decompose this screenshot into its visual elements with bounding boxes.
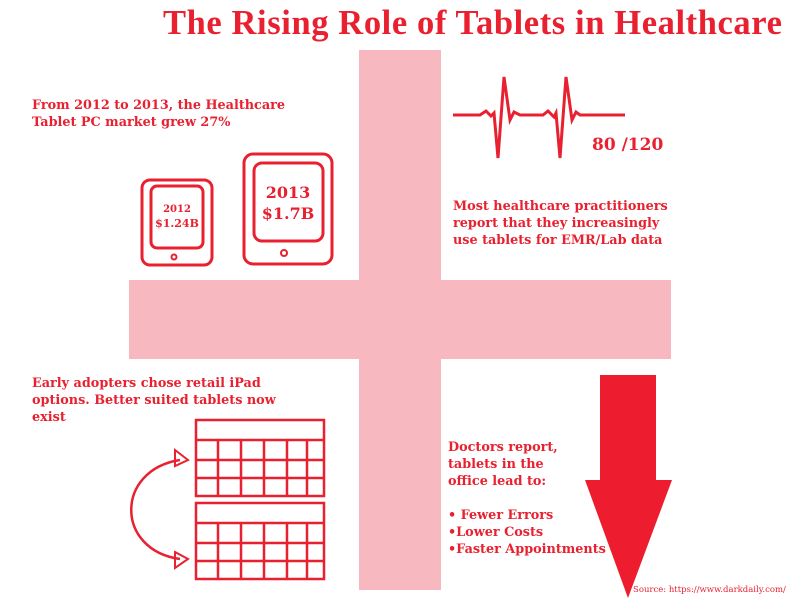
icon: tablets <box>140 152 334 266</box>
text: doctors report <box>448 440 606 557</box>
source: Source: https://www.darkdaily.com/ <box>633 585 786 595</box>
text: market growth <box>32 98 285 130</box>
text: practitioners: Most healthcare practitioners <box>453 199 668 214</box>
text: market growth: From 2012 to 2013, the Healthcare <box>32 98 285 113</box>
icon: tablets: $1.7B <box>262 204 314 223</box>
text: practitioners: use tablets for EMR/Lab data <box>453 233 662 248</box>
text: early adopters <box>32 376 276 425</box>
title: The Rising Role of Tablets in Healthcare <box>163 4 782 42</box>
text: early adopters: exist <box>32 410 66 425</box>
icon: tablets: 2013 <box>266 183 310 202</box>
icon: tablets: 2012 <box>163 204 191 215</box>
icon: tables with arrow <box>130 418 326 580</box>
text: early adopters: options. Better suited tablets now <box>32 393 276 408</box>
text: doctors report: • Fewer Errors <box>448 508 553 523</box>
text: practitioners: report that they increasingly <box>453 216 659 231</box>
icon: ECG line: 80 /120 <box>592 135 663 155</box>
text: doctors report: •Lower Costs <box>448 525 543 540</box>
text: doctors report: Doctors report, <box>448 440 558 455</box>
icon: down arrow <box>585 375 672 598</box>
icon: ECG line <box>453 76 663 158</box>
text: doctors report: office lead to: <box>448 474 546 489</box>
text: market growth: Tablet PC market grew 27% <box>32 115 230 130</box>
text: early adopters: Early adopters chose retail iPad <box>32 376 261 391</box>
text: doctors report: tablets in the <box>448 457 544 472</box>
icon: tablets: $1.24B <box>155 217 199 230</box>
text: practitioners <box>453 199 668 248</box>
text: doctors report: •Faster Appointments <box>448 542 606 557</box>
